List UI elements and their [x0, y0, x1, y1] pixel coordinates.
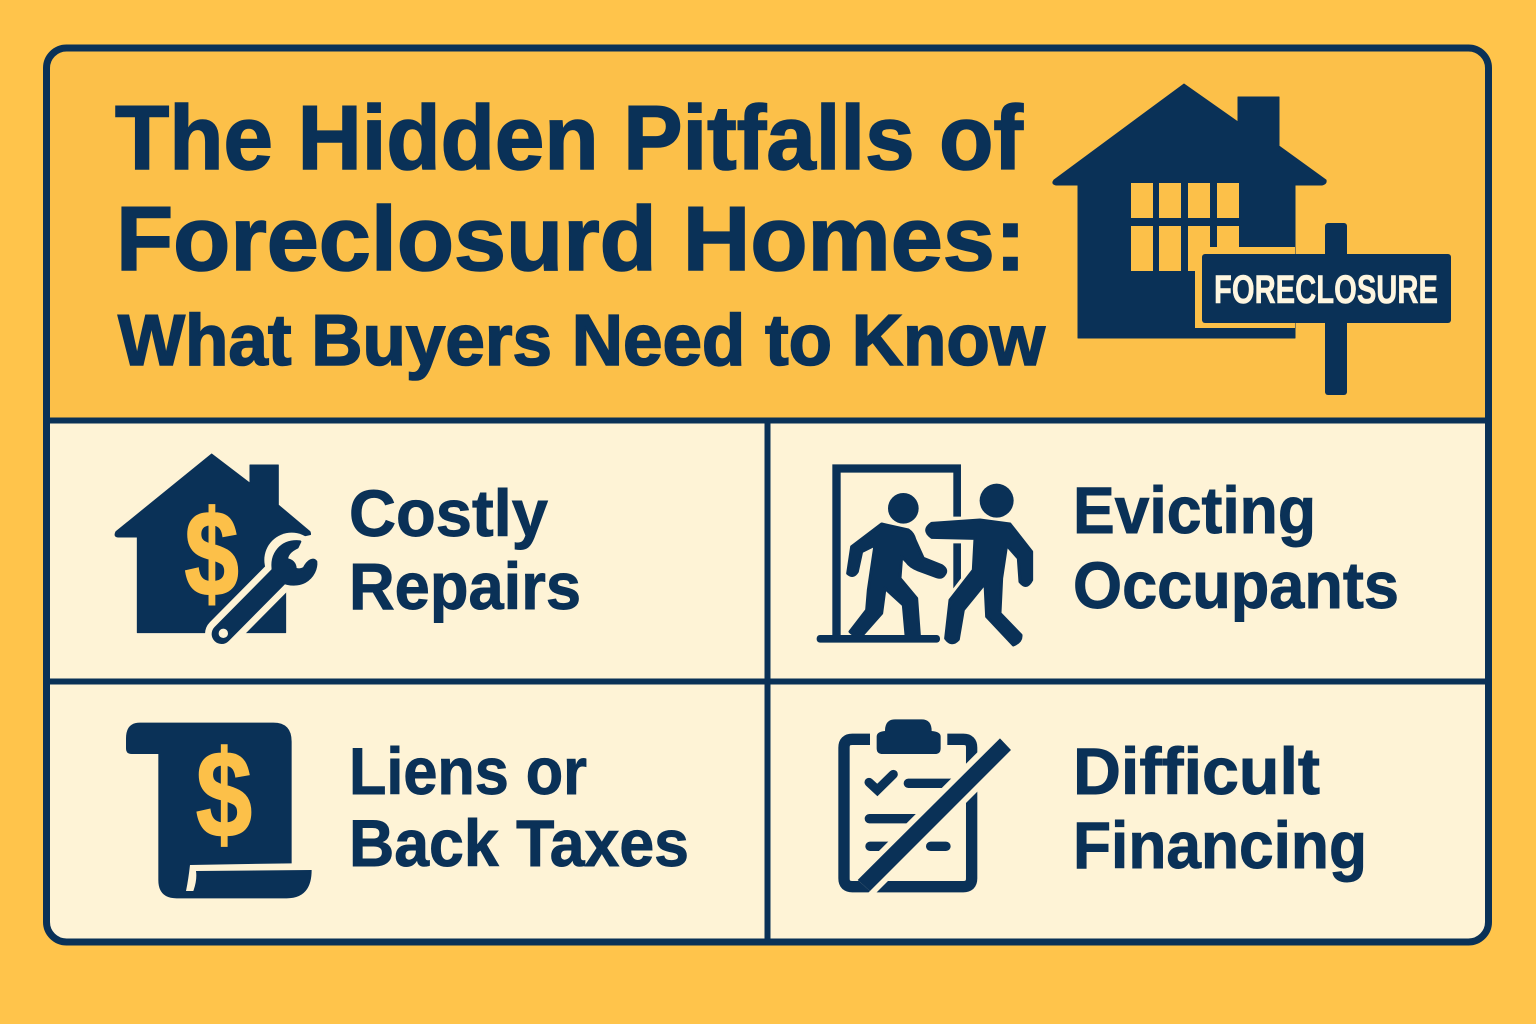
icon: foreclosed house with sign — [1053, 84, 1451, 395]
icon: figure escorted out of a door — [817, 464, 1032, 645]
heading: costly repairs: Costly — [349, 476, 548, 550]
heading: costly repairs: Repairs — [349, 549, 581, 623]
heading: difficult financing: Financing — [1073, 808, 1367, 882]
icon: house with dollar and wrench: $ — [185, 486, 239, 622]
title — [115, 88, 1046, 381]
icon: scroll with dollar: $ — [196, 725, 252, 863]
panel: header background — [46, 48, 1489, 420]
icon: scroll with dollar — [126, 723, 312, 898]
heading: evicting occupants: Occupants — [1073, 548, 1399, 622]
panel: costly repairs — [115, 454, 581, 638]
heading: evicting occupants — [1073, 473, 1399, 622]
panel: evicting occupants — [817, 464, 1399, 645]
title: The Hidden Pitfalls of — [115, 88, 1024, 189]
panel: liens or back taxes — [126, 723, 689, 898]
icon: house with dollar and wrench — [115, 454, 333, 638]
panel: difficult financing — [844, 719, 1367, 898]
heading: liens or back taxes: Liens or — [349, 734, 587, 808]
icon: crossed-out clipboard — [844, 719, 1015, 898]
heading: difficult financing — [1073, 734, 1367, 882]
heading: costly repairs — [349, 476, 581, 623]
heading: difficult financing: Difficult — [1073, 734, 1320, 808]
heading: evicting occupants: Evicting — [1073, 473, 1316, 547]
icon: foreclosed house with sign: FORECLOSURE — [1214, 268, 1438, 312]
panel: content background — [46, 420, 1489, 942]
heading: liens or back taxes — [349, 734, 689, 880]
heading: liens or back taxes: Back Taxes — [349, 806, 689, 880]
title: What Buyers Need to Know — [118, 301, 1046, 381]
title: Foreclosurd Homes: — [116, 189, 1026, 290]
